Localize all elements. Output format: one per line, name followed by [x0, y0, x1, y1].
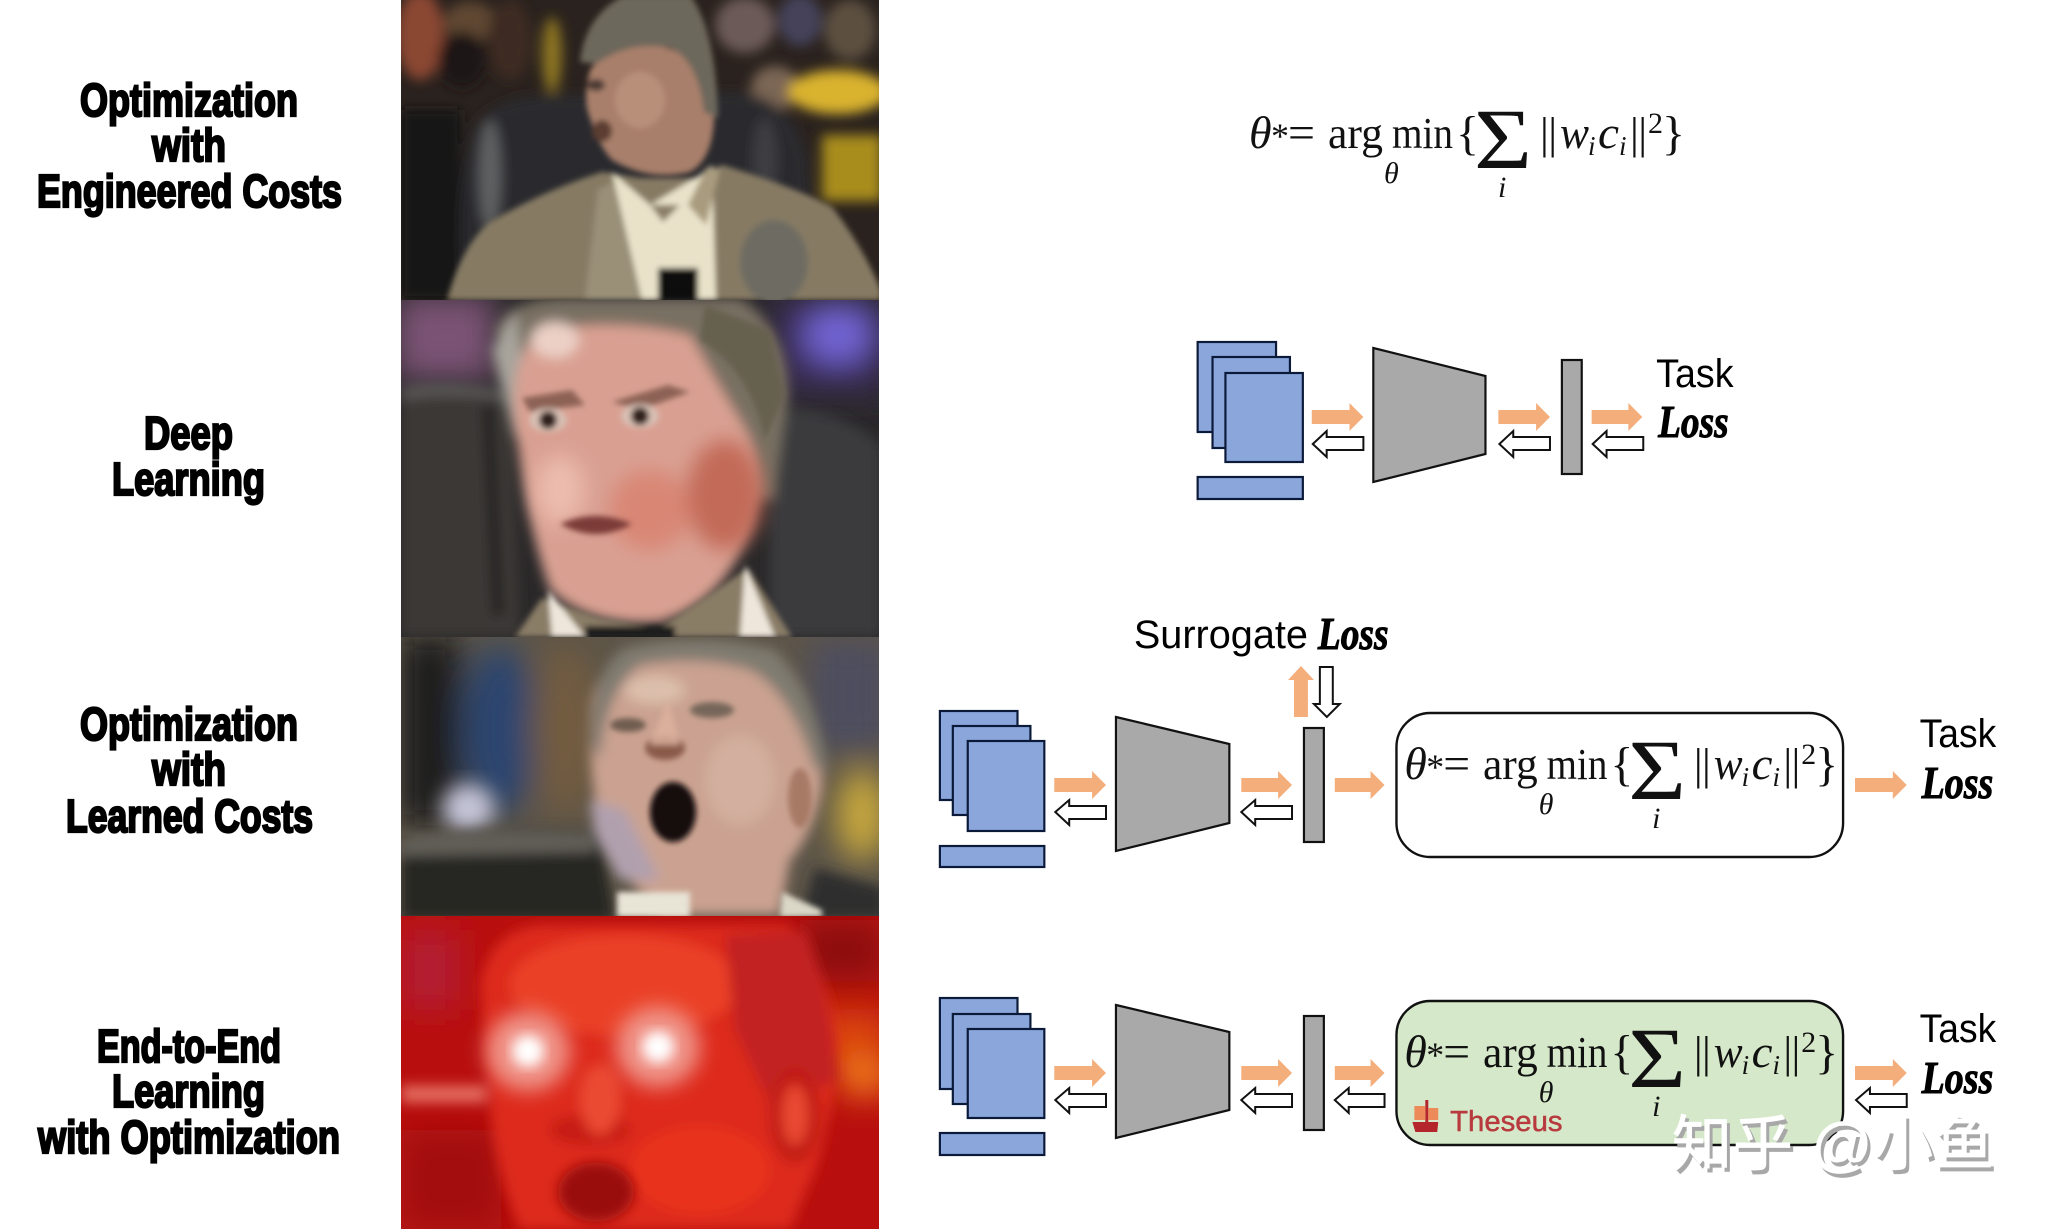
- formula in box: i: [1742, 762, 1749, 792]
- label: Optimization with Learned Costs: [66, 698, 313, 842]
- backward arrows: [1313, 431, 1643, 457]
- feature bar: [1304, 728, 1324, 842]
- formula: engineered cost objective: i: [1498, 171, 1506, 204]
- icon: stacked input images: [940, 998, 1044, 1155]
- formula: engineered cost objective: min: [1392, 109, 1453, 158]
- formula: engineered cost objective: i: [1588, 131, 1596, 161]
- formula in box: min: [1547, 1029, 1607, 1077]
- label: Optimization with Engineered Costs: with: [151, 119, 226, 171]
- formula in box: arg: [1483, 1029, 1538, 1077]
- formula in box: θ: [1404, 1026, 1427, 1077]
- forward arrows: [1054, 771, 1907, 799]
- formula in box: ||: [1783, 741, 1800, 789]
- formula in box: i: [1772, 762, 1780, 792]
- formula in box: 2: [1801, 738, 1816, 771]
- task loss label: [1920, 1007, 1996, 1103]
- formula: engineered cost objective: arg: [1328, 109, 1383, 158]
- formula in box: 2: [1801, 1026, 1816, 1059]
- photo panel 2: wide-eyed close-up: [395, 295, 890, 638]
- formula in box: =: [1443, 1026, 1470, 1077]
- formula in box: θ: [1539, 788, 1553, 821]
- differentiable optimization box: [1396, 1001, 1843, 1145]
- formula: engineered cost objective: ||: [1630, 109, 1647, 158]
- formula: engineered cost objective: *: [1271, 116, 1289, 156]
- watermark: 知乎 @小鱼: [1675, 1115, 1997, 1182]
- formula: engineered cost objective: θ: [1249, 107, 1272, 158]
- formula: engineered cost objective: {: [1456, 107, 1479, 160]
- label: Optimization with Learned Costs: Optimization: [80, 698, 298, 750]
- formula in box: [1404, 723, 1838, 835]
- diagram row: end-to-end with Theseus: [940, 998, 1996, 1155]
- formula in box: c: [1752, 1026, 1772, 1077]
- backward arrows: [1055, 800, 1292, 825]
- label: Deep Learning: [112, 407, 265, 505]
- icon: stacked input images: [1198, 342, 1303, 499]
- label: Optimization with Engineered Costs: Optimization: [80, 74, 298, 126]
- photo panel 1: man looking aside, calm: [396, 0, 888, 304]
- surrogate loss label: [1134, 608, 1389, 659]
- formula: engineered cost objective: i: [1619, 131, 1627, 161]
- label: End-to-End Learning with Optimization: Learning: [112, 1065, 265, 1117]
- formula in box: c: [1752, 738, 1772, 789]
- optimization box: [1396, 713, 1843, 857]
- formula: engineered cost objective: θ: [1384, 157, 1399, 190]
- formula in box: w: [1714, 1026, 1743, 1077]
- task loss label: Task: [1920, 1007, 1996, 1051]
- label: Deep Learning: Learning: [112, 453, 265, 505]
- formula: engineered cost objective: c: [1598, 107, 1619, 158]
- label: End-to-End Learning with Optimization: [37, 1020, 340, 1163]
- diagram row: deep learning: [1198, 342, 1734, 499]
- formula in box: {: [1610, 738, 1633, 791]
- label: Optimization with Engineered Costs: Engineered Costs: [37, 165, 342, 217]
- formula in box: θ: [1404, 738, 1427, 789]
- formula in box: *: [1426, 747, 1444, 787]
- formula: engineered cost objective: [1249, 91, 1685, 204]
- formula in box: i: [1652, 802, 1660, 835]
- formula: engineered cost objective: ||: [1540, 109, 1557, 158]
- formula in box: [1404, 1011, 1838, 1123]
- formula in box: i: [1742, 1050, 1749, 1080]
- formula in box: θ: [1539, 1076, 1553, 1109]
- formula: engineered cost objective: 2: [1648, 107, 1663, 140]
- watermark: 知乎 @小鱼: [1672, 1111, 1994, 1178]
- label: Optimization with Learned Costs: Learned Costs: [66, 790, 313, 842]
- task loss label: [1656, 352, 1734, 447]
- network trapezoid: [1116, 717, 1229, 851]
- formula in box: w: [1714, 738, 1743, 789]
- formula in box: Σ: [1628, 723, 1686, 818]
- formula in box: ||: [1694, 1029, 1711, 1077]
- formula: engineered cost objective: =: [1288, 107, 1315, 158]
- feature bar: [1304, 1016, 1324, 1130]
- surrogate loss label: Surrogate: [1134, 613, 1308, 657]
- task loss label: Loss: [1657, 396, 1729, 447]
- photo panel 4: red glowing eyes: [400, 916, 890, 1229]
- label: End-to-End Learning with Optimization: End-to-End: [97, 1020, 281, 1072]
- icon: stacked input images: [940, 711, 1044, 867]
- label: Optimization with Engineered Costs: [37, 74, 342, 217]
- Theseus wordmark: Theseus: [1450, 1106, 1563, 1138]
- formula in box: =: [1443, 738, 1470, 789]
- formula in box: min: [1547, 741, 1607, 789]
- icon: Theseus ship: [1412, 1100, 1438, 1132]
- formula in box: arg: [1483, 741, 1538, 789]
- task loss label: [1920, 712, 1996, 808]
- label: End-to-End Learning with Optimization: with Optimization: [37, 1111, 340, 1163]
- formula: engineered cost objective: }: [1662, 107, 1685, 160]
- task loss label: Loss: [1921, 1052, 1993, 1103]
- task loss label: Task: [1920, 712, 1996, 756]
- icon: glowing eyes: [486, 1007, 700, 1091]
- formula in box: i: [1772, 1050, 1780, 1080]
- formula in box: }: [1815, 1026, 1838, 1079]
- forward arrows: [1054, 1059, 1907, 1087]
- formula in box: {: [1610, 1026, 1633, 1079]
- backward arrows: [1055, 1088, 1907, 1113]
- formula in box: Σ: [1628, 1011, 1686, 1106]
- network trapezoid: [1116, 1005, 1229, 1138]
- formula: engineered cost objective: Σ: [1474, 91, 1532, 187]
- label: Deep Learning: Deep: [144, 407, 233, 459]
- photo panel 3: open-mouth upward gaze: [400, 635, 890, 920]
- formula in box: ||: [1694, 741, 1711, 789]
- formula in box: i: [1652, 1090, 1660, 1123]
- diagram row: learned costs: [940, 608, 1996, 867]
- surrogate loss label: Loss: [1317, 608, 1389, 659]
- network trapezoid: [1373, 348, 1485, 482]
- feature bar: [1562, 360, 1582, 474]
- formula: engineered cost objective: w: [1560, 107, 1589, 158]
- formula in box: *: [1426, 1035, 1444, 1075]
- formula in box: }: [1815, 738, 1838, 791]
- forward arrows: [1312, 403, 1642, 431]
- task loss label: Loss: [1921, 757, 1993, 808]
- arrows to surrogate loss: [1288, 666, 1340, 717]
- task loss label: Task: [1656, 352, 1734, 396]
- formula in box: ||: [1783, 1029, 1800, 1077]
- label: Optimization with Learned Costs: with: [151, 743, 226, 795]
